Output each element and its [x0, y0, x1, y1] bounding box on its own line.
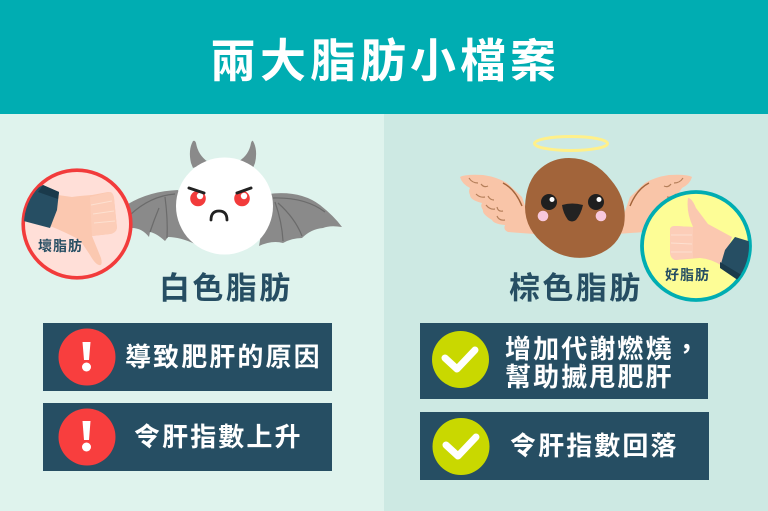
thumbs up hand: [670, 198, 749, 280]
sleeve: [24, 185, 59, 228]
right bat wing: [259, 193, 342, 246]
icon: bad fat thumbs down badge: [20, 170, 131, 278]
bar: liver index rises: [43, 403, 332, 471]
text: 增加代謝燃燒，: [505, 334, 702, 364]
title: 兩大脂肪小檔案: [210, 35, 560, 87]
label: bad fat: 壞脂肪: [38, 238, 83, 254]
cheeks: [538, 211, 606, 221]
left angel wing: [460, 175, 535, 234]
thumbs down hand: [20, 185, 117, 265]
text: 令肝指數上升: [134, 422, 303, 452]
sleeve: [721, 237, 749, 278]
body: [176, 158, 273, 254]
panel: white fat background: [0, 114, 384, 511]
panel: brown fat background: [384, 114, 768, 511]
right horn: [239, 141, 256, 168]
bar: boosts metabolism: [420, 323, 708, 399]
icon: good fat thumbs up badge: [642, 192, 755, 300]
label: good fat: 好脂肪: [665, 267, 710, 283]
text: 導致肥肝的原因: [125, 342, 322, 372]
left horn: [190, 141, 208, 168]
icon: check: [432, 418, 490, 475]
bar: cause of fatty liver: [43, 323, 332, 391]
icon: brown fat angel: [460, 136, 692, 258]
angry eyebrows: [189, 188, 251, 193]
bar: liver index falls: [420, 412, 709, 480]
right angel wing: [617, 175, 692, 234]
icon: warning: [58, 408, 116, 466]
heading: brown fat: 棕色脂肪: [509, 271, 643, 306]
text: 幫助揻甩肥肝: [505, 362, 674, 392]
body: [525, 158, 625, 258]
icon: warning: [58, 328, 116, 386]
heading: white fat: 白色脂肪: [159, 271, 293, 306]
header band: [0, 0, 768, 114]
frown: [211, 211, 227, 220]
beak: [562, 204, 583, 222]
halo: [534, 136, 608, 150]
left bat wing: [128, 190, 195, 244]
icon: white fat devil bat: [128, 141, 342, 254]
icon: check: [432, 331, 489, 388]
left eye: [190, 191, 206, 206]
text: 令肝指數回落: [510, 431, 679, 461]
eyes: [541, 194, 604, 210]
right eye: [234, 191, 250, 206]
